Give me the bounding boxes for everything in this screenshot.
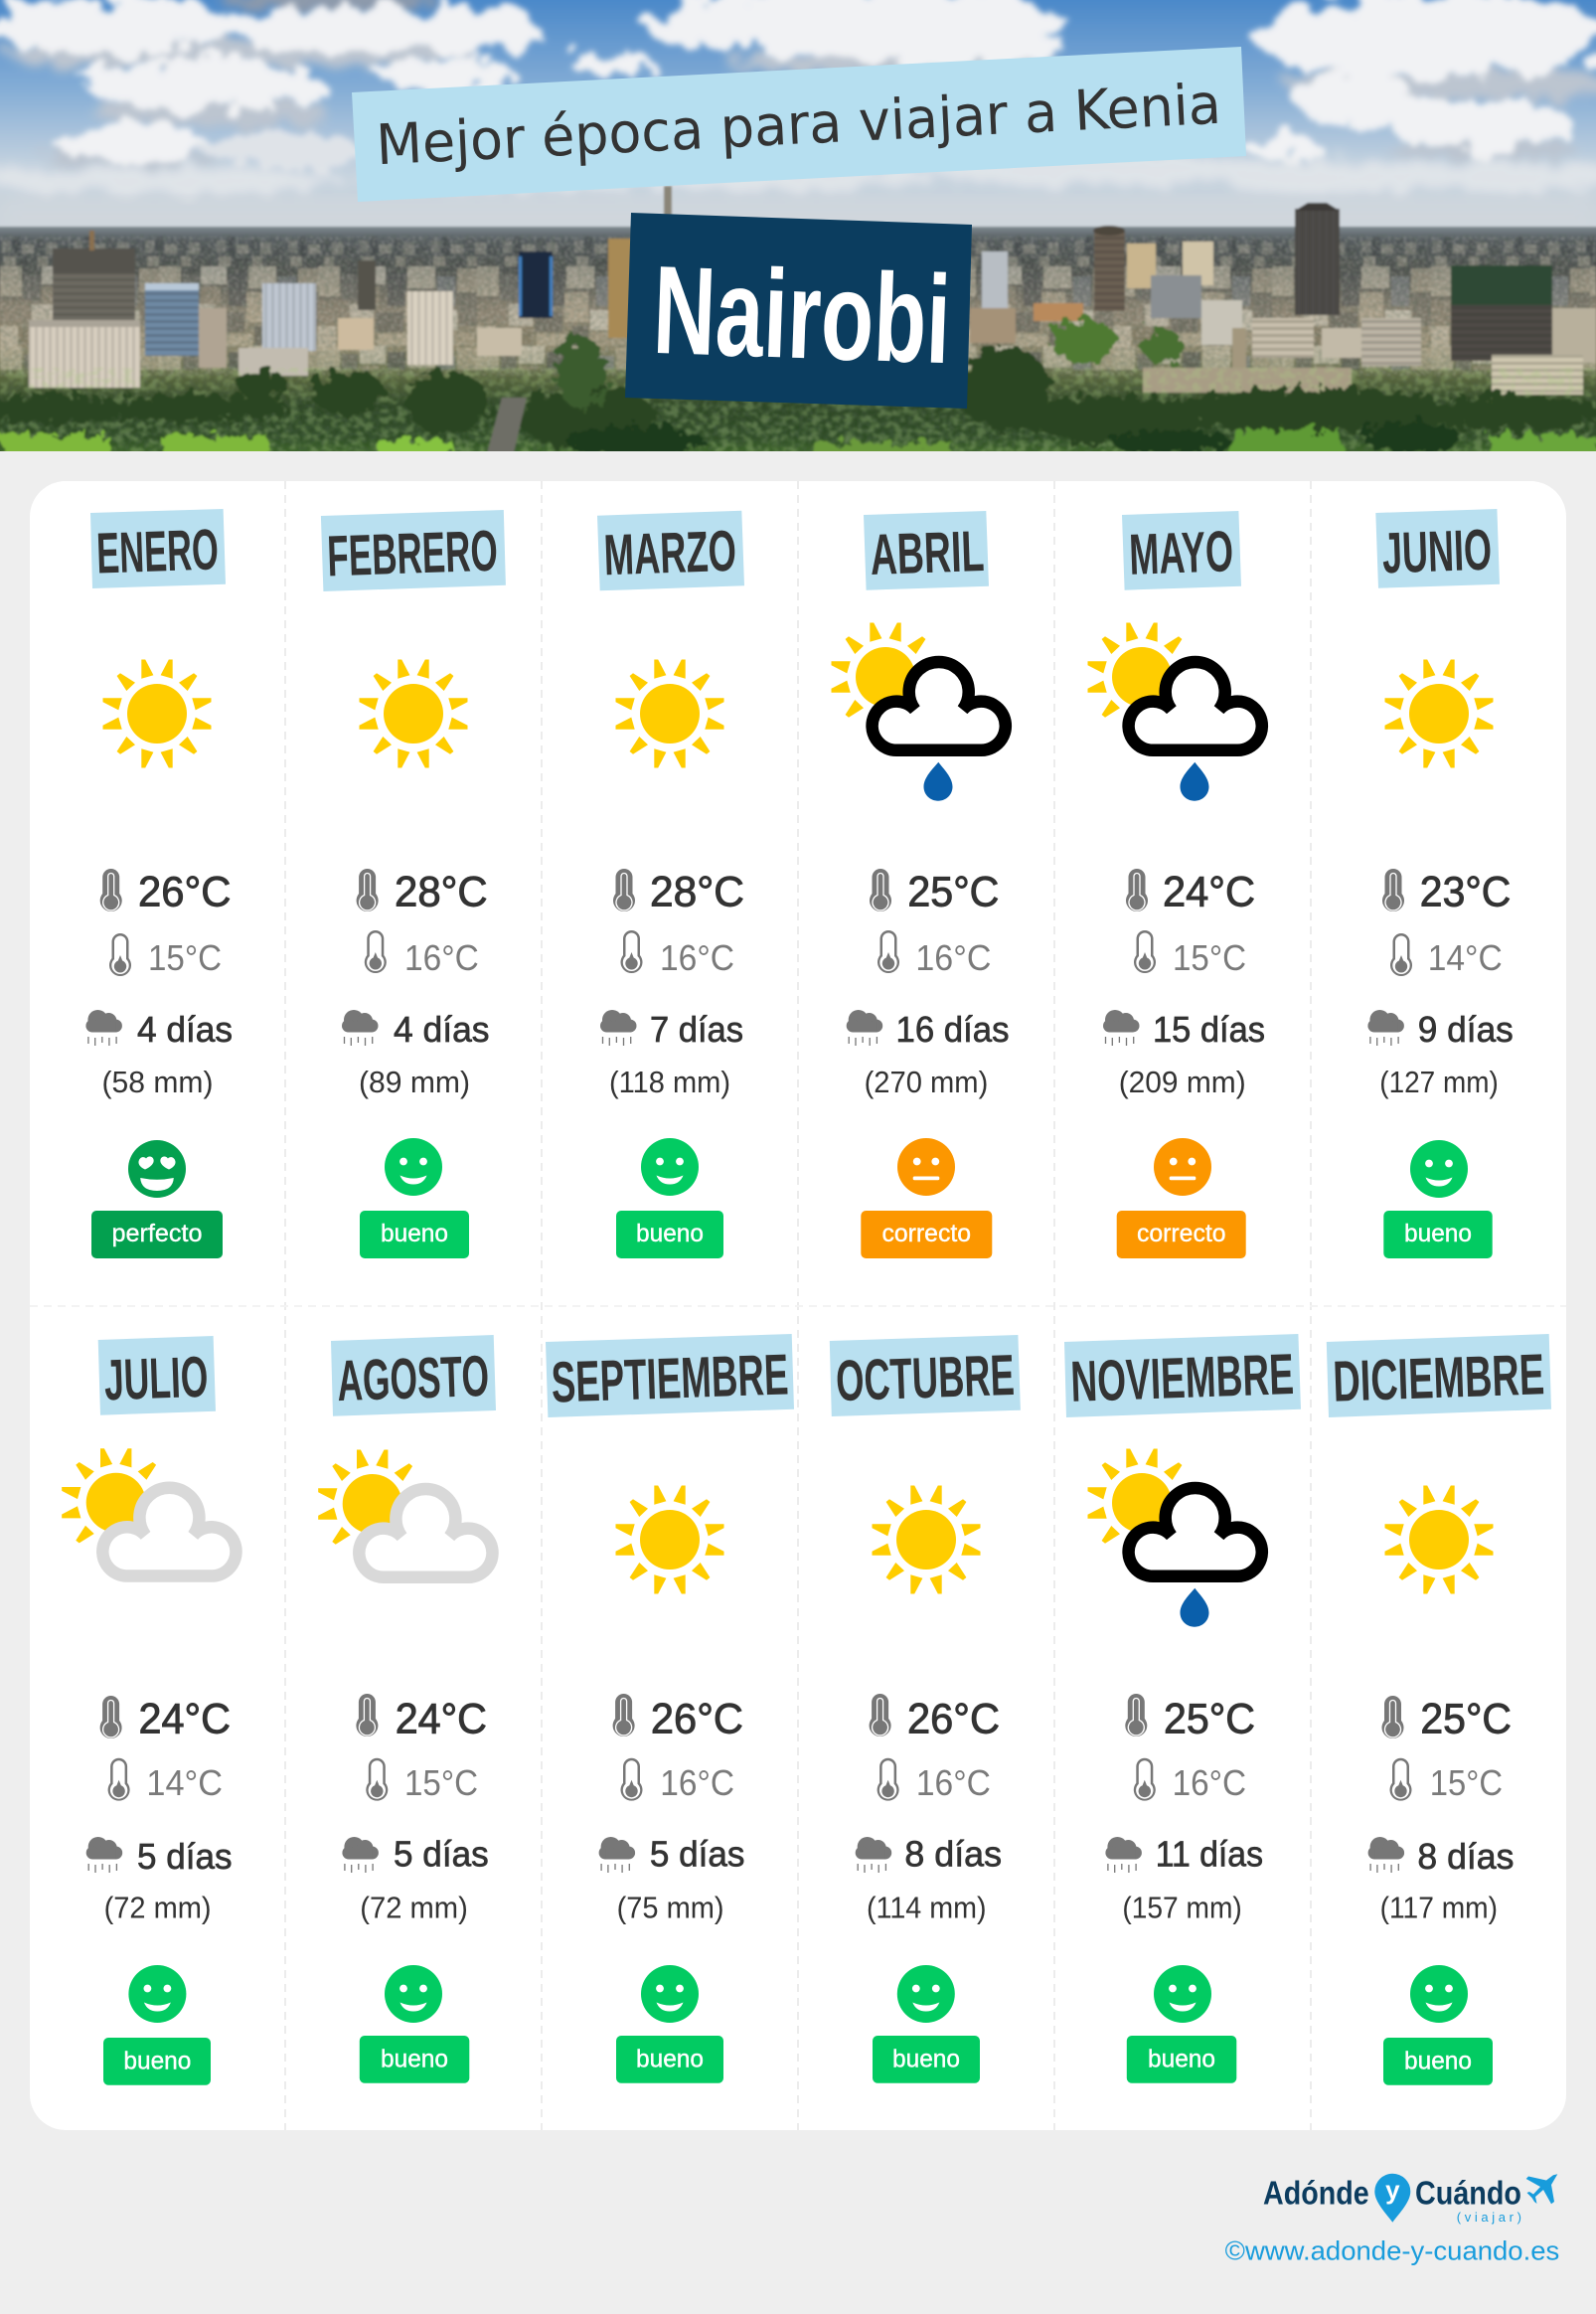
month label: febrero [321, 510, 506, 591]
icon: max thermometer [100, 869, 122, 911]
month label: mayo [1122, 511, 1241, 590]
icon: max thermometer [100, 1696, 122, 1738]
icon: min thermometer [366, 1758, 388, 1801]
column: julio [62, 1336, 237, 2085]
weather icon: sun [616, 660, 723, 767]
month label: octubre: OCTUBRE [835, 1343, 1016, 1413]
icon: min thermometer [878, 930, 899, 973]
icon: rain cloud [1367, 1010, 1404, 1046]
website credit: ©www.adonde-y-cuando.es [1225, 2235, 1559, 2265]
min temperature: 15°C [1430, 1762, 1503, 1803]
rainfall: (75 mm) [617, 1890, 724, 1924]
rating badge: perfecto [111, 1220, 203, 1247]
rating badge: bueno [892, 2045, 960, 2072]
icon: min thermometer [365, 930, 387, 973]
icon: min thermometer [620, 930, 642, 973]
icon: max thermometer [356, 1694, 378, 1736]
min temperature: 15°C [148, 937, 222, 978]
icon: max thermometer [870, 869, 891, 911]
icon: rain cloud [86, 1837, 122, 1873]
icon: max thermometer [1382, 869, 1404, 911]
min temperature: 14°C [146, 1762, 223, 1803]
rating badge [360, 1211, 469, 1258]
icon: map pin [1374, 2174, 1410, 2223]
month label: septiembre: SEPTIEMBRE [551, 1342, 789, 1415]
rainy days: 11 días [1156, 1834, 1263, 1875]
min temperature: 16°C [1173, 1762, 1246, 1803]
rainfall: (72 mm) [360, 1890, 468, 1924]
month label: junio: JUNIO [1381, 518, 1493, 585]
column: febrero [321, 510, 506, 1258]
icon: min thermometer [108, 1758, 130, 1801]
icon: rain cloud [599, 1837, 635, 1873]
icon: rating face [128, 1140, 186, 1198]
rating badge: bueno [636, 1220, 704, 1247]
logo: Adónde y Cuándo: Adónde [1263, 2175, 1369, 2212]
max temperature: 24°C [396, 1695, 487, 1742]
icon: min thermometer [109, 933, 131, 976]
icon: min thermometer [620, 1758, 642, 1801]
rating badge: correcto [1137, 1220, 1226, 1247]
icon: rain cloud [847, 1010, 882, 1046]
icon: rating face [641, 1138, 699, 1196]
icon: max thermometer [1126, 869, 1148, 911]
month label: julio [98, 1336, 216, 1415]
icon: max thermometer [613, 869, 635, 911]
icon: max thermometer [870, 1694, 891, 1736]
column: abril [831, 511, 1010, 1258]
max temperature: 23°C [1420, 869, 1511, 916]
icon: rating face [1154, 1965, 1211, 2023]
rainfall: (270 mm) [865, 1065, 988, 1099]
icon: rating face [385, 1965, 442, 2023]
city name banner: Nairobi [651, 240, 953, 390]
max temperature: 28°C [650, 869, 744, 916]
max temperature: 25°C [907, 869, 999, 916]
month label: abril [864, 511, 989, 590]
rating badge: bueno [123, 2048, 191, 2075]
rainfall: (114 mm) [867, 1890, 986, 1924]
column: noviembre [1064, 1334, 1301, 2083]
column: septiembre [546, 1334, 794, 2083]
rating badge [103, 2038, 211, 2085]
month label: noviembre [1064, 1334, 1301, 1417]
column: marzo [597, 511, 744, 1258]
icon: rain cloud [342, 1010, 378, 1046]
icon: max thermometer [1125, 1694, 1147, 1736]
rainy days: 4 días [394, 1009, 489, 1050]
rating badge [616, 1211, 723, 1258]
rainfall: (127 mm) [1379, 1065, 1499, 1099]
weather icon: sun, cloud and rain [1087, 622, 1262, 801]
month label: octubre [830, 1335, 1021, 1416]
icon: rain cloud [856, 1837, 891, 1873]
icon: max thermometer [1381, 1696, 1403, 1738]
rating badge: bueno [1404, 2048, 1472, 2075]
panel: monthly climate grid [30, 481, 1566, 2130]
max temperature: 28°C [395, 869, 488, 916]
max temperature: 26°C [651, 1695, 743, 1742]
icon: rain cloud [85, 1010, 122, 1046]
max temperature: 24°C [139, 1695, 231, 1742]
rating badge [616, 2036, 723, 2083]
rating badge [1117, 1211, 1246, 1258]
icon: min thermometer [1390, 933, 1412, 976]
rating badge [861, 1211, 992, 1258]
rainy days: 5 días [137, 1836, 233, 1877]
icon: rain cloud [342, 1837, 379, 1873]
rating badge [1383, 1211, 1493, 1258]
header photo: Nairobi skyline [0, 0, 1596, 461]
icon: min thermometer [878, 1758, 899, 1801]
weather icon: sun [1385, 1485, 1493, 1594]
rainy days: 8 días [1417, 1836, 1514, 1877]
icon: min thermometer [1134, 930, 1156, 973]
month label: marzo [597, 511, 744, 590]
logo: Adónde y Cuándo: Cuándo [1415, 2175, 1521, 2212]
icon: rating face [1154, 1138, 1211, 1196]
max temperature: 25°C [1420, 1695, 1512, 1742]
rainy days: 5 días [650, 1834, 744, 1875]
rating badge: bueno [1148, 2045, 1215, 2072]
max temperature: 26°C [907, 1695, 1000, 1742]
month label: agosto: AGOSTO [336, 1344, 490, 1413]
icon: plane [1526, 2174, 1557, 2204]
rainfall: (58 mm) [101, 1065, 213, 1099]
rainy days: 8 días [904, 1834, 1002, 1875]
rainfall: (72 mm) [104, 1890, 212, 1924]
icon: rain cloud [600, 1010, 636, 1046]
rating badge: bueno [381, 2045, 448, 2072]
weather icon: sun [873, 1485, 980, 1594]
month label: julio: JULIO [103, 1345, 209, 1412]
weather icon: sun [103, 660, 211, 767]
rainy days: 7 días [650, 1009, 743, 1050]
min temperature: 14°C [1428, 937, 1503, 978]
icon: max thermometer [613, 1694, 635, 1736]
title banner [352, 47, 1246, 202]
rainfall: (118 mm) [609, 1065, 730, 1099]
column: junio [1367, 509, 1514, 1258]
rainy days: 16 días [896, 1009, 1010, 1050]
rainy days: 9 días [1418, 1009, 1514, 1050]
column: agosto [318, 1335, 496, 2083]
rating badge [1383, 2038, 1493, 2085]
weather icon: sun [360, 660, 467, 767]
icon: map pin: y [1385, 2175, 1400, 2205]
rainy days: 4 días [137, 1009, 233, 1050]
max temperature: 24°C [1163, 869, 1255, 916]
icon: rain cloud [1103, 1010, 1139, 1046]
rating badge: bueno [1404, 1220, 1472, 1247]
logo: Adónde y Cuándo: (viajar) [1457, 2210, 1521, 2225]
logo: Adónde y Cuándo [1263, 2174, 1557, 2225]
rating badge [873, 2036, 980, 2083]
month label: mayo: MAYO [1128, 519, 1234, 587]
weather icon: sun and cloud [318, 1449, 493, 1577]
column: diciembre [1327, 1334, 1551, 2085]
rainfall: (117 mm) [1380, 1890, 1498, 1924]
month label: marzo: MARZO [603, 519, 737, 587]
city name banner [625, 213, 972, 409]
rating badge: correcto [882, 1220, 971, 1247]
rating badge: bueno [636, 2045, 704, 2072]
icon: max thermometer [357, 869, 379, 911]
title banner: Mejor época para viajar a Kenia [375, 73, 1222, 178]
icon: rain cloud [1368, 1837, 1404, 1873]
rating badge [360, 2036, 469, 2083]
icon: rating face [128, 1965, 186, 2023]
min temperature: 16°C [916, 1762, 991, 1803]
month label: enero: ENERO [95, 517, 220, 586]
month label: noviembre: NOVIEMBRE [1069, 1342, 1295, 1414]
min temperature: 15°C [404, 1762, 478, 1803]
column: enero [85, 509, 233, 1258]
min temperature: 15°C [1173, 937, 1246, 978]
icon: rating face [385, 1138, 442, 1196]
rainfall: (89 mm) [359, 1065, 470, 1099]
max temperature: 25°C [1164, 1695, 1255, 1742]
min temperature: 16°C [404, 937, 479, 978]
icon: rating face [641, 1965, 699, 2023]
month label: enero [90, 509, 226, 588]
weather icon: sun [1385, 660, 1493, 767]
rating badge [91, 1211, 223, 1258]
column: octubre [830, 1335, 1021, 2083]
weather icon: sun, cloud and rain [831, 622, 1006, 801]
month label: febrero: FEBRERO [326, 519, 499, 588]
icon: rating face [1410, 1965, 1468, 2023]
icon: min thermometer [1134, 1758, 1156, 1801]
weather icon: sun [616, 1485, 723, 1594]
weather icon: sun, cloud and rain [1087, 1449, 1262, 1627]
rainfall: (209 mm) [1119, 1065, 1246, 1099]
weather icon: sun and cloud [62, 1448, 237, 1576]
min temperature: 16°C [915, 937, 991, 978]
rating badge: bueno [381, 1220, 448, 1247]
month label: agosto [331, 1335, 496, 1416]
icon: rain cloud [1105, 1837, 1142, 1873]
icon: rating face [897, 1138, 955, 1196]
month label: junio [1375, 509, 1500, 588]
icon: rating face [1410, 1140, 1468, 1198]
month label: septiembre [546, 1334, 794, 1417]
rainy days: 5 días [394, 1834, 489, 1875]
rainy days: 15 días [1153, 1009, 1265, 1050]
month label: abril: ABRIL [870, 519, 985, 587]
column: mayo [1087, 511, 1265, 1258]
max temperature: 26°C [138, 869, 231, 916]
icon: rating face [897, 1965, 955, 2023]
min temperature: 16°C [660, 1762, 734, 1803]
icon: min thermometer [1389, 1758, 1411, 1801]
min temperature: 16°C [660, 937, 734, 978]
rainfall: (157 mm) [1122, 1890, 1242, 1924]
rating badge [1127, 2036, 1236, 2083]
